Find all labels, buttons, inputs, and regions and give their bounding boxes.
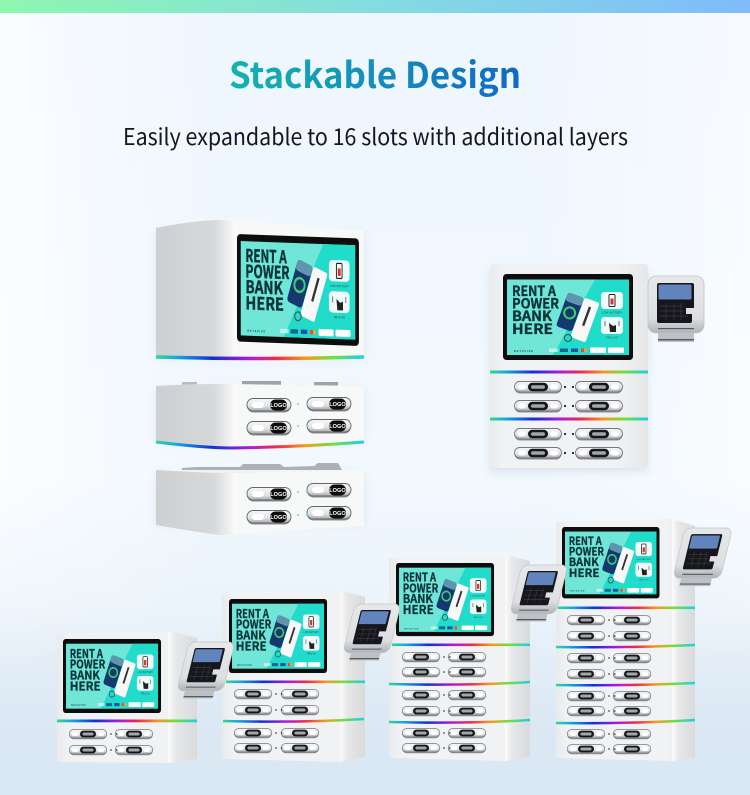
card terminal — [175, 642, 235, 699]
exploded stack — [156, 220, 364, 535]
stack with 16 slots and screen: BANK — [569, 553, 599, 570]
stack with 4 slots and screen: TAP & GO — [141, 692, 150, 696]
assembled front view unit: POWER — [512, 294, 559, 314]
slot logos: LOGO — [270, 426, 287, 432]
stack with 16 slots and screen: HERE — [569, 564, 600, 581]
slot logos: LOGO — [270, 492, 287, 498]
rainbow strip — [156, 442, 364, 448]
tilted screen — [237, 234, 359, 346]
tilted screen: POWER — [245, 258, 290, 285]
stack with 8 slots and screen: POWER — [236, 616, 271, 633]
stack with 4 slots and screen: BANK — [70, 667, 100, 684]
stack with 12 slots and screen: POWER — [403, 580, 439, 597]
tilted screen: BANK — [245, 274, 283, 300]
top unit with screen — [156, 220, 364, 358]
slot logos: LOGO — [270, 403, 287, 409]
assembled front view unit: LOW BATTERY — [602, 310, 622, 314]
assembled front view unit: TAP & GO — [606, 336, 618, 340]
slot logos: LOGO — [329, 488, 346, 494]
tilted screen: HERE — [245, 290, 284, 316]
stack with 16 slots and screen — [556, 519, 733, 761]
stack with 12 slots and screen: HERE — [403, 601, 434, 618]
bottom layer — [156, 463, 364, 535]
stack with 12 slots and screen: BETAVISE — [404, 627, 419, 630]
stack with 12 slots and screen: BANK — [403, 590, 433, 607]
stack with 4 slots and screen: LOW BATTERY — [138, 671, 153, 674]
stack with 16 slots and screen: TAP & GO — [639, 578, 649, 582]
card terminal — [671, 528, 733, 586]
slot logos — [247, 398, 351, 436]
stack with 4 slots and screen — [57, 631, 235, 763]
stack with 4 slots and screen: HERE — [70, 678, 101, 695]
rainbow strip — [156, 357, 364, 358]
stack with 12 slots and screen: RENT A — [403, 569, 437, 586]
assembled front view unit: RENT A — [512, 281, 557, 301]
stack with 12 slots and screen — [389, 555, 568, 761]
stack with 8 slots and screen: BANK — [236, 627, 266, 644]
stack with 8 slots and screen: BETAVISE — [237, 664, 252, 667]
card terminal — [508, 565, 568, 622]
middle layer — [156, 381, 364, 448]
assembled front view unit: HERE — [512, 319, 553, 339]
tilted screen: BETAVISE — [247, 328, 265, 334]
stack with 12 slots and screen: LOW BATTERY — [471, 594, 486, 598]
tilted screen: TAP & GO — [334, 315, 346, 320]
stack with 16 slots and screen: LOW BATTERY — [636, 558, 652, 561]
background — [0, 163, 750, 795]
assembled front view unit — [490, 264, 704, 472]
stack with 16 slots and screen: RENT A — [569, 533, 603, 549]
slot logos: LOGO — [270, 515, 287, 521]
stack with 8 slots and screen — [222, 590, 401, 762]
stack with 16 slots and screen: POWER — [569, 543, 604, 560]
stack with 16 slots and screen: BETAVISE — [570, 590, 585, 593]
slot logos: LOGO — [329, 424, 346, 430]
card terminal — [648, 276, 704, 342]
slot logos — [247, 484, 351, 524]
slot logos: LOGO — [329, 402, 346, 408]
stack with 8 slots and screen: RENT A — [236, 605, 270, 622]
tilted screen: RENT A — [245, 243, 287, 269]
stack with 4 slots and screen: BETAVISE — [71, 704, 86, 707]
stack with 8 slots and screen: HERE — [236, 638, 267, 655]
stack with 4 slots and screen: POWER — [70, 656, 105, 673]
assembled front view unit: BETAVISE — [514, 349, 533, 353]
stack with 8 slots and screen: LOW BATTERY — [304, 631, 319, 634]
title: Stackable Design — [229, 47, 521, 99]
assembled front view unit: BANK — [512, 306, 552, 326]
stack with 12 slots and screen: TAP & GO — [474, 616, 483, 619]
tilted screen: LOW BATTERY — [330, 283, 349, 289]
subtitle: Easily expandable to 16 slots with additional layers — [123, 118, 628, 152]
card terminal — [341, 604, 401, 661]
top gradient bar — [0, 0, 750, 13]
slot logos: LOGO — [329, 511, 346, 517]
stack with 8 slots and screen: TAP & GO — [307, 652, 316, 656]
stack with 4 slots and screen: RENT A — [70, 645, 104, 662]
